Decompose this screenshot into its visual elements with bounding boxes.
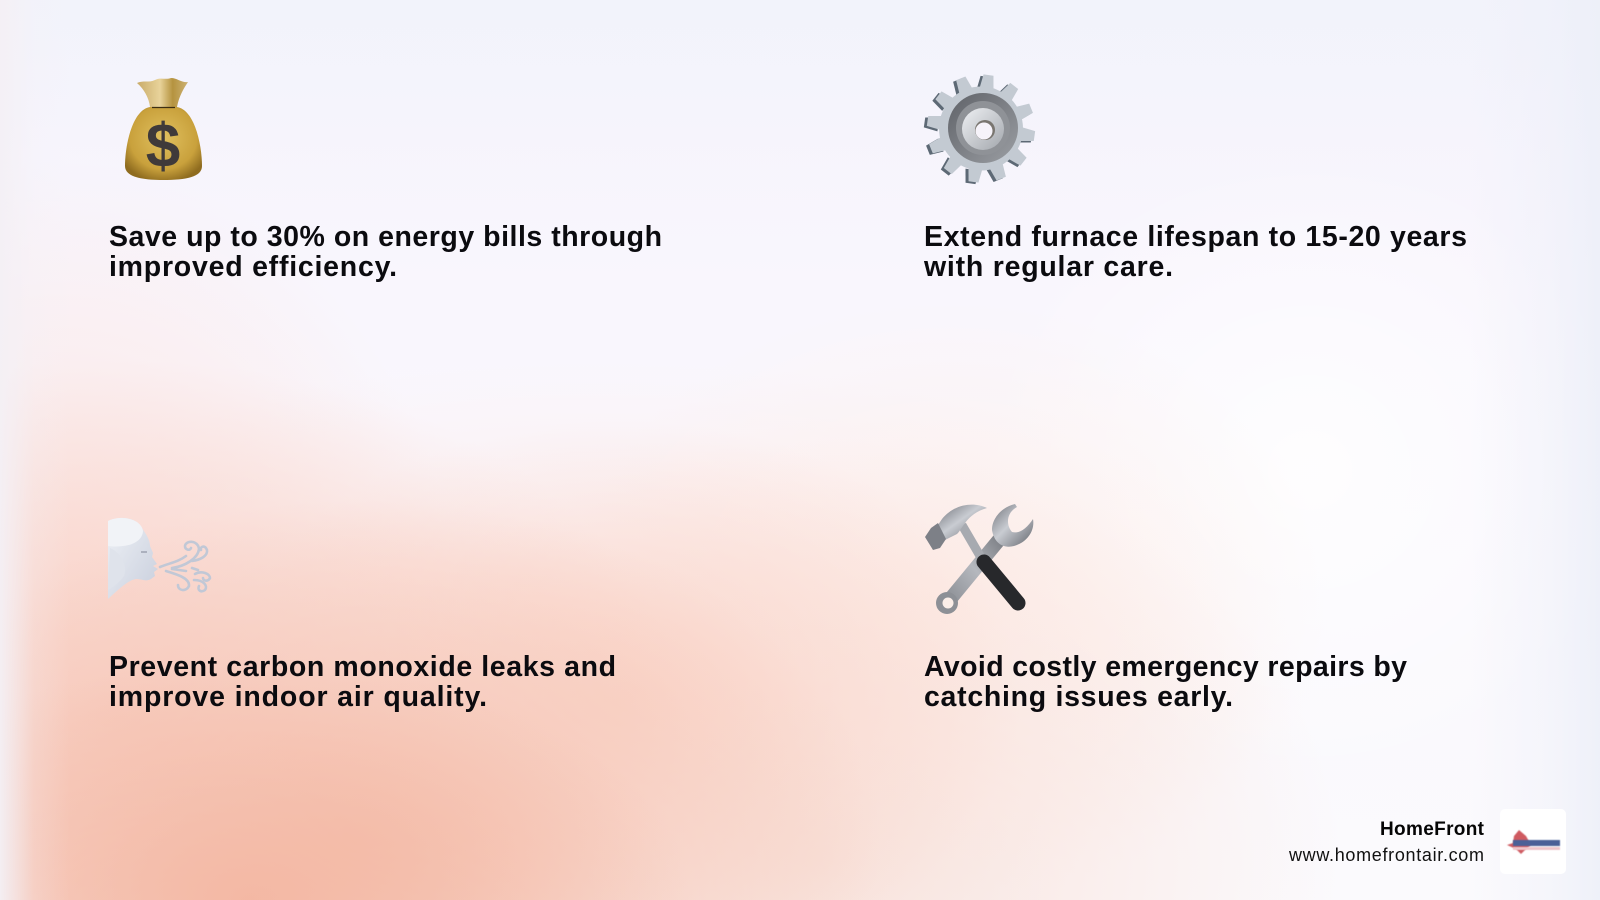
heading: carbon monoxide: improve indoor air quality. (109, 681, 487, 713)
logo (1500, 809, 1566, 874)
icon: money bag (125, 78, 202, 181)
heading: carbon monoxide (109, 651, 616, 713)
heading: repairs: Avoid costly emergency repairs by (924, 651, 1407, 683)
icon: hammer and wrench (925, 504, 1033, 614)
brand url: www.homefrontair.com (1288, 845, 1484, 865)
heading: save energy (109, 221, 662, 283)
panel: emergency repairs (924, 504, 1407, 713)
heading: save energy: improved efficiency. (109, 251, 397, 283)
panel: furnace lifespan (923, 74, 1467, 283)
brand name: HomeFront (1380, 819, 1485, 840)
icon: face blowing wind (108, 518, 210, 599)
icon: gear (924, 74, 1035, 184)
panel: air quality (108, 518, 616, 713)
footer: brand (1288, 809, 1566, 874)
icon: money bag: $ (146, 112, 180, 181)
heading: carbon monoxide: Prevent carbon monoxide leaks and (109, 651, 616, 683)
heading: save energy: Save up to 30% on energy bills through (109, 221, 662, 253)
heading: lifespan (923, 221, 1467, 283)
heading: lifespan: with regular care. (923, 251, 1173, 283)
heading: repairs (924, 651, 1407, 713)
heading: repairs: catching issues early. (924, 681, 1233, 713)
panel: energy savings (109, 78, 662, 283)
heading: lifespan: Extend furnace lifespan to 15-20 years (924, 221, 1467, 253)
